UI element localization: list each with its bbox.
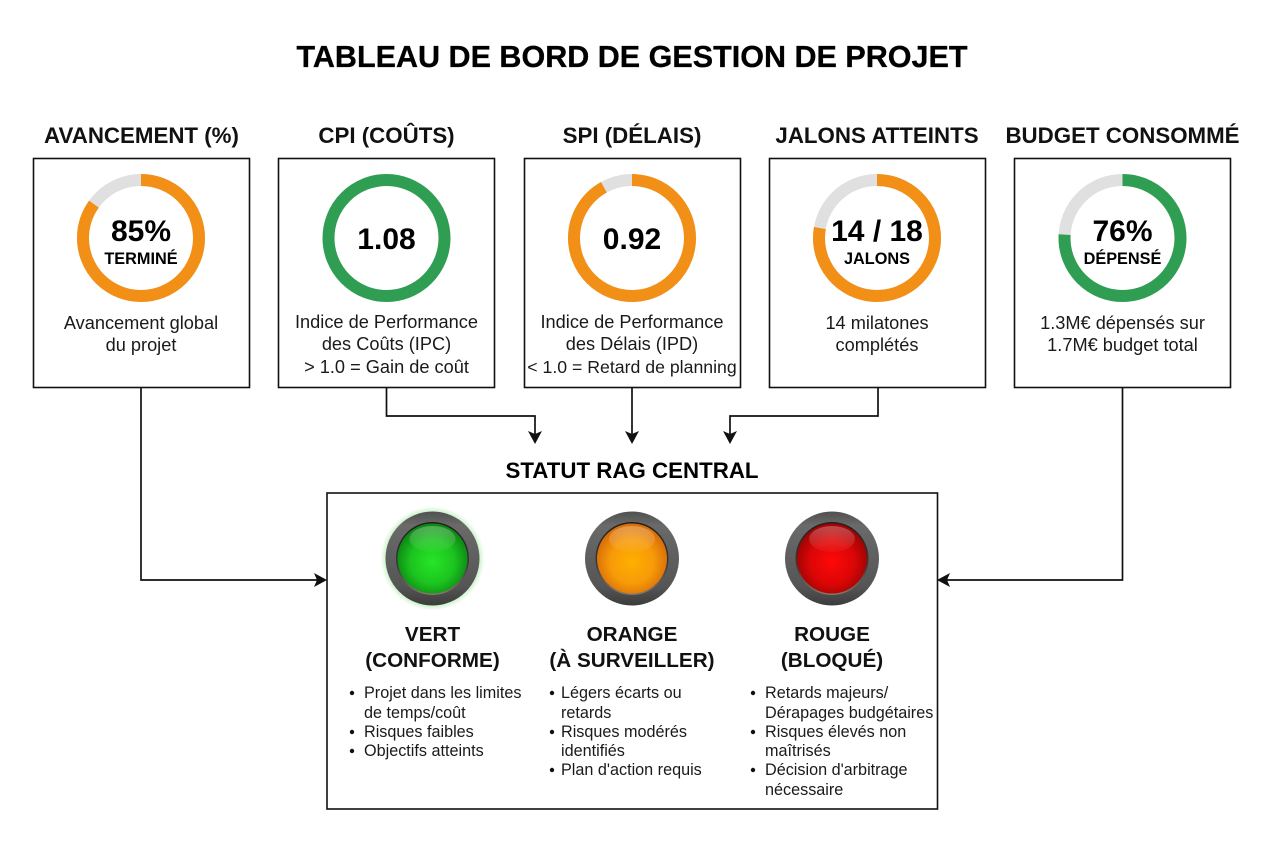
description: jalons: complétés: [836, 335, 918, 355]
list: vert: [350, 684, 521, 760]
icon: orange light: [585, 512, 679, 606]
list: rouge: nécessaire: [765, 781, 843, 799]
donut: 0.92: 0.92: [603, 223, 661, 256]
list: rouge: Risques élevés non: [765, 723, 906, 741]
arrow: avancement to RAG: [141, 388, 327, 587]
list: vert: de temps/coût: [364, 704, 466, 722]
donut: 14 / 18: JALONS: [844, 250, 910, 268]
list: orange: retards: [561, 704, 611, 722]
description: SPI: des Délais (IPD): [566, 334, 698, 354]
arrow: SPI to RAG: [625, 388, 639, 444]
list: orange: [550, 684, 702, 779]
donut: 14 / 18: [819, 180, 935, 296]
list: rouge: maîtrisés: [765, 742, 831, 760]
donut: 85%: 85%: [111, 215, 171, 248]
arrow: CPI to RAG: [386, 388, 542, 444]
heading: budget: BUDGET CONSOMMÉ: [1005, 123, 1240, 148]
arrow: jalons to RAG: [723, 388, 878, 444]
description: budget: 1.3M€ dépensés sur: [1040, 313, 1205, 333]
label: vert: VERT: [405, 623, 460, 646]
list: rouge: Décision d'arbitrage: [765, 761, 908, 779]
donut: 85%: [83, 180, 199, 296]
description: avancement: du projet: [106, 335, 176, 355]
heading: CPI: CPI (COÛTS): [318, 123, 455, 148]
donut: 85%: TERMINÉ: [104, 249, 178, 268]
arrow: budget to RAG: [937, 388, 1122, 587]
list: orange: identifiés: [561, 742, 625, 760]
list: orange: Plan d'action requis: [561, 761, 702, 779]
donut: 1.08: [328, 180, 444, 296]
label: orange: ORANGE: [587, 623, 677, 646]
donut: 14 / 18: 14 / 18: [831, 215, 923, 248]
panel: CPI: [278, 123, 494, 388]
status: vert: [350, 506, 521, 760]
description: CPI: des Coûts (IPC): [322, 334, 451, 354]
list: vert: Objectifs atteints: [364, 742, 484, 760]
heading: avancement: AVANCEMENT (%): [44, 123, 239, 148]
donut: 76%: 76%: [1092, 215, 1153, 248]
label: vert: (CONFORME): [365, 649, 500, 672]
description: budget: 1.7M€ budget total: [1047, 335, 1198, 355]
description: CPI: Indice de Performance: [295, 312, 478, 332]
heading: statut RAG central: STATUT RAG CENTRAL: [505, 458, 759, 483]
description: CPI: > 1.0 = Gain de coût: [304, 357, 469, 377]
label: rouge: ROUGE: [794, 623, 870, 646]
list: vert: Risques faibles: [364, 723, 474, 741]
status: orange: [549, 512, 715, 779]
status: rouge: [751, 512, 933, 799]
panel: statut RAG: [327, 493, 938, 809]
heading: jalons: JALONS ATTEINTS: [775, 123, 979, 148]
heading: SPI: SPI (DÉLAIS): [563, 123, 701, 148]
list: rouge: Retards majeurs/: [765, 684, 889, 702]
label: orange: (À SURVEILLER): [549, 649, 715, 672]
donut: 76%: DÉPENSÉ: [1084, 249, 1162, 268]
icon: green light: [380, 506, 484, 610]
list: rouge: Dérapages budgétaires: [765, 704, 933, 722]
panel: avancement: [34, 123, 250, 388]
list: orange: Risques modérés: [561, 723, 687, 741]
title: TABLEAU DE BORD DE GESTION DE PROJET: [296, 39, 968, 74]
donut: 1.08: 1.08: [357, 223, 416, 256]
donut: 0.92: [574, 180, 690, 296]
panel: budget: [1005, 123, 1240, 388]
list: rouge: [751, 684, 933, 799]
panel: SPI: [524, 123, 740, 388]
panel: jalons: [770, 123, 986, 388]
list: orange: Légers écarts ou: [561, 684, 682, 702]
icon: red light: [785, 512, 879, 606]
label: rouge: (BLOQUÉ): [781, 649, 883, 672]
description: SPI: Indice de Performance: [540, 312, 724, 332]
description: SPI: < 1.0 = Retard de planning: [527, 357, 737, 377]
description: avancement: Avancement global: [64, 313, 218, 333]
list: vert: Projet dans les limites: [364, 684, 521, 702]
description: jalons: 14 milatones: [825, 313, 929, 333]
donut: 76%: [1064, 180, 1180, 296]
